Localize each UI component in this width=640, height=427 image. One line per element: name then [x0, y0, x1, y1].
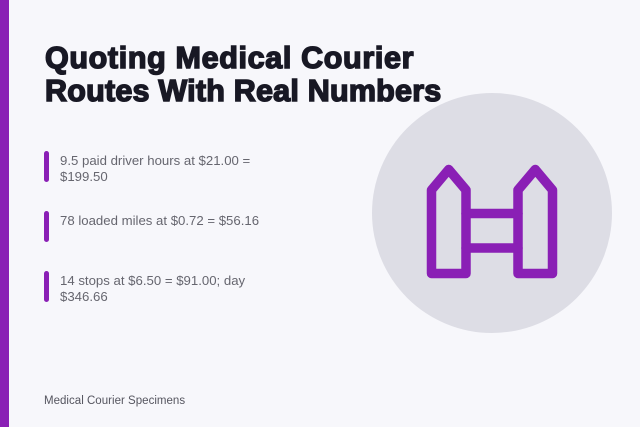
bullet: stops and day total: $346.66 [60, 289, 108, 304]
title: Quoting Medical Courier [45, 41, 414, 75]
accent bar: left edge [0, 0, 9, 427]
bullet: driver hours: $199.50 [60, 169, 108, 184]
bullet: loaded miles: 78 loaded miles at $0.72 = $56.16 [60, 213, 259, 228]
title [45, 41, 441, 108]
bullet: driver hours [44, 151, 250, 184]
illustration: fence icon in circle [372, 93, 612, 333]
icon: fence [432, 170, 552, 274]
footer source label: Medical Courier Specimens [44, 395, 185, 407]
circle backdrop [372, 93, 612, 333]
bullet: stops and day total [44, 271, 245, 304]
title: Routes With Real Numbers [45, 74, 441, 108]
bullet: stops and day total: 14 stops at $6.50 = $91.00; day [60, 273, 245, 288]
bullet: loaded miles [44, 211, 259, 242]
bullet: driver hours: 9.5 paid driver hours at $21.00 = [60, 153, 250, 168]
